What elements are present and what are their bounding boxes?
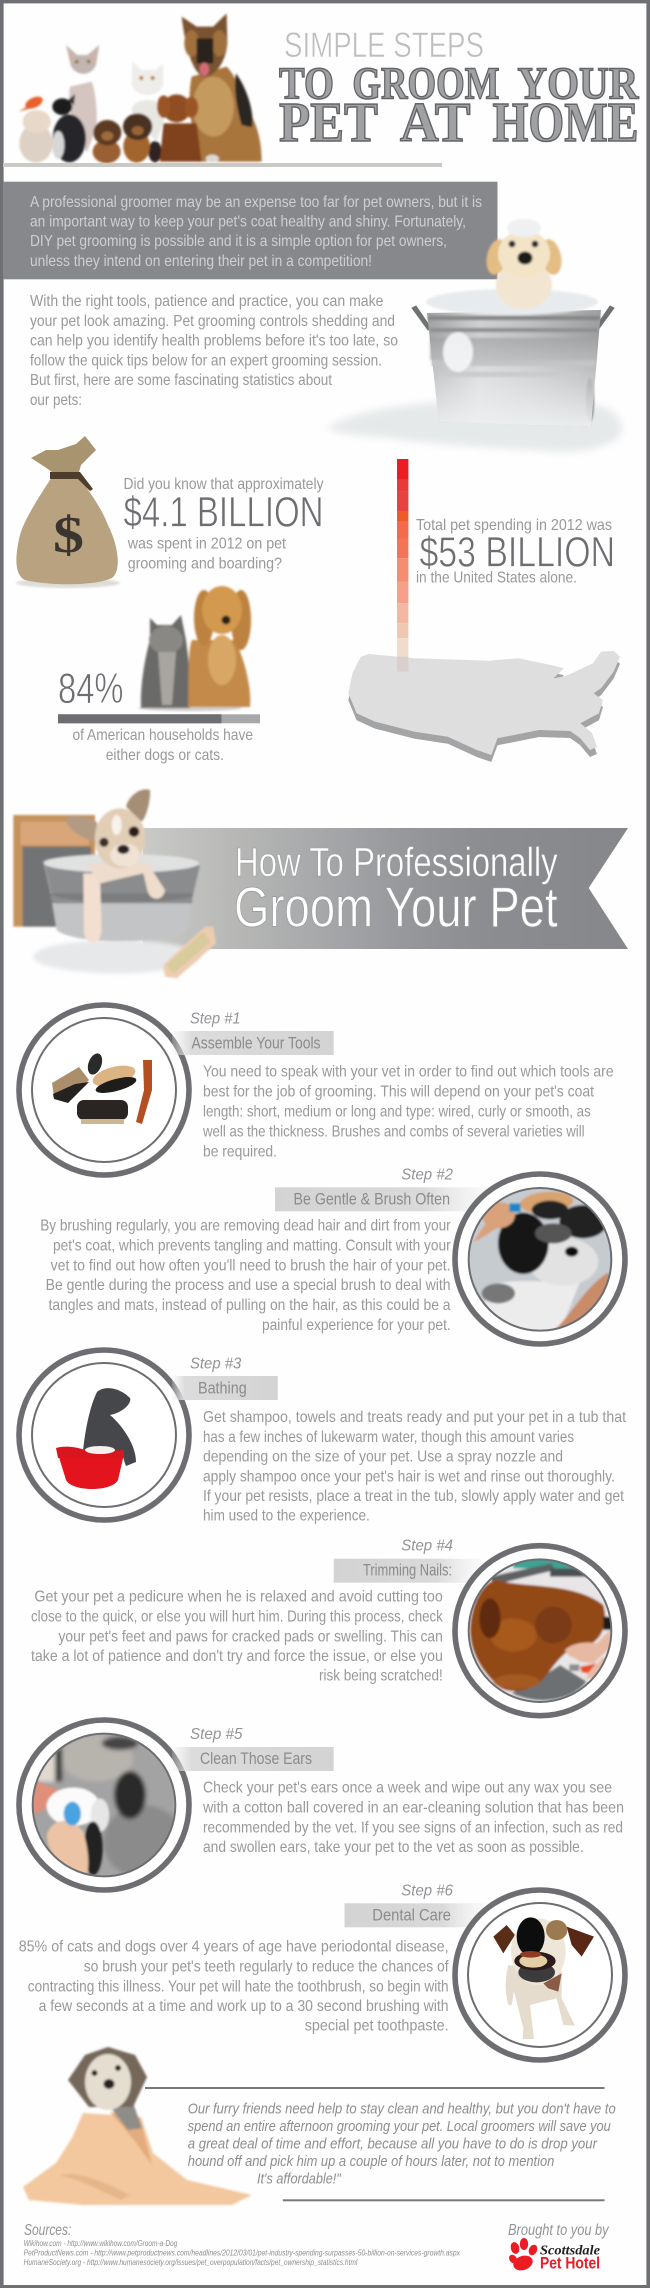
illustration: puppy in foamy tub	[327, 219, 622, 452]
panel: step 4: your pet's feet and paws for cracked pads or swelling. This can	[58, 1629, 443, 1646]
panel: step 2: By brushing regularly, you are removing dead hair and dirt from your	[40, 1218, 451, 1235]
stat: 4.1 billion: $4.1 BILLION	[124, 489, 324, 537]
stat: 53 billion: in the United States alone.	[416, 570, 577, 587]
text block: intro paragraph: our pets:	[30, 392, 82, 409]
logo: Scottsdale Pet Hotel: Brought to you by	[508, 2222, 609, 2239]
text block: intro paragraph: your pet look amazing. Pet grooming controls shedding and	[30, 313, 395, 330]
panel: step 4: close to the quick, or else you will hurt him. During this process, check	[31, 1609, 444, 1626]
panel: step 4: risk being scratched!	[319, 1668, 443, 1685]
panel: intro: unless they intend on entering their pet in a competition!	[30, 253, 372, 270]
illustration: french bulldog in tub	[13, 789, 216, 978]
illustration: wet dog in towel	[23, 2047, 252, 2205]
banner: section heading: How To Professionally	[235, 839, 558, 885]
panel: step 3: Step #3	[190, 1355, 241, 1372]
panel: step 4: Step #4	[401, 1538, 453, 1555]
step 2 circle with brushing photo	[455, 1174, 625, 1344]
panel: step 5	[19, 1720, 624, 1890]
illustration: cat and dog	[138, 586, 251, 711]
panel: step 2: Step #2	[401, 1166, 453, 1183]
panel: step 4	[31, 1538, 625, 1716]
panel: step 1: be required.	[203, 1143, 277, 1160]
stat: 4.1 billion: Did you know that approximately	[124, 476, 324, 493]
callout: closing quote: a great deal of time and effort, because all you have to do is drop your	[188, 2136, 598, 2153]
panel: step 5: Clean Those Ears	[200, 1750, 312, 1768]
panel: step 3: him used to the experience.	[203, 1508, 370, 1525]
text block: intro paragraph	[30, 293, 398, 409]
logo: Scottsdale Pet Hotel	[507, 2222, 609, 2273]
stat: 4.1 billion: was spent in 2012 on pet	[127, 535, 286, 552]
text block: sources: HumaneSociety.org - http://www.humanesociety.org/issues/pet_overpopulation/facts/pet_ownership_statistics.html	[24, 2257, 358, 2267]
logo: Scottsdale Pet Hotel: Scottsdale	[540, 2243, 600, 2258]
panel: step 6: so brush your pet's teeth regularly to reduce the chances of	[84, 1959, 449, 1976]
panel: step 4: Get your pet a pedicure when he is relaxed and avoid cutting too	[34, 1589, 443, 1606]
text block: sources: Sources:	[24, 2222, 71, 2239]
icon: money bag	[16, 436, 120, 588]
stat: 53 billion	[416, 517, 615, 587]
step 1 circle with grooming tools	[19, 1005, 189, 1175]
panel: step 4: Trimming Nails:	[363, 1561, 452, 1579]
callout: closing quote: hound off and pick him up a couple of hours later, not to mention	[188, 2153, 554, 2170]
panel: step 4: take a lot of patience and don't try and force the issue, or else you	[31, 1648, 443, 1665]
stat: 4.1 billion: grooming and boarding?	[128, 555, 282, 572]
text block: intro paragraph: follow the quick tips below for an expert grooming session.	[30, 353, 382, 370]
header shelf	[3, 163, 442, 167]
stat: 84 percent: of American households have	[72, 727, 253, 744]
panel: intro: A professional groomer may be an expense too far for pet owners, but it is	[30, 194, 482, 211]
panel: step 2: painful experience for your pet.	[262, 1317, 451, 1334]
panel: step 1	[19, 1005, 614, 1175]
icon: money bag: $	[53, 507, 84, 564]
panel: step 3: Bathing	[198, 1379, 247, 1397]
text block: intro paragraph: But first, here are some fascinating statistics about	[30, 372, 332, 389]
panel: step 2: vet to find out how often you'll need to brush the hair of your pet.	[51, 1258, 451, 1275]
title: PET	[279, 92, 378, 154]
panel: step 3: has a few inches of lukewarm water, though this amount varies	[203, 1429, 574, 1446]
banner: section heading	[143, 828, 628, 949]
stat: 84 percent: 84%	[58, 665, 124, 713]
panel: step 2: tangles and mats, instead of pulling on the hair, as this could be a	[48, 1297, 451, 1314]
step 6 circle with snarling dog	[455, 1890, 625, 2060]
title: YOUR	[517, 58, 639, 108]
panel: intro: DIY pet grooming is possible and it is a simple option for pet owners,	[30, 233, 447, 250]
title: GROOM	[352, 58, 499, 108]
panel: step 6: Dental Care	[372, 1907, 451, 1925]
panel: step 5: and swollen ears, take your pet to the vet as soon as possible.	[203, 1839, 584, 1856]
title	[279, 26, 639, 154]
stat: 4.1 billion	[124, 476, 324, 572]
illustration: group of pets	[18, 13, 262, 163]
text block: sources: Wikihow.com - http://www.wikihow.com/Groom-a-Dog	[24, 2238, 178, 2248]
panel: intro: an important way to keep your pet's coat healthy and shiny. Fortunately,	[30, 214, 466, 230]
panel: step 6: Step #6	[401, 1883, 453, 1900]
panel: step 6	[19, 1883, 625, 2060]
step 4 circle with nail trimming photo	[455, 1546, 625, 1716]
panel: step 5: Step #5	[190, 1726, 243, 1743]
panel: step 1: Assemble Your Tools	[192, 1034, 320, 1052]
panel: step 2: Be Gentle & Brush Often	[294, 1190, 450, 1208]
chart: US map with spending bar	[348, 459, 620, 762]
panel: step 3	[19, 1350, 626, 1525]
panel: step 2: pet's coat, which prevents tangling and matting. Consult with your	[53, 1238, 451, 1255]
text block: sources	[24, 2222, 461, 2267]
panel: step 3: depending on the size of your pet. Use a spray nozzle and	[203, 1449, 563, 1466]
callout: closing quote: It's affordable!"	[257, 2170, 341, 2187]
panel: intro	[3, 182, 498, 279]
title: SIMPLE STEPS	[284, 26, 484, 65]
title: AT	[400, 92, 470, 154]
step 5 circle with ear cleaning photo	[19, 1720, 189, 1890]
callout: closing quote	[145, 2087, 616, 2201]
panel: step 2	[40, 1166, 625, 1344]
stat: 84 percent: either dogs or cats.	[106, 747, 224, 764]
banner: section heading: Groom Your Pet	[234, 876, 558, 940]
logo: Scottsdale Pet Hotel: Pet Hotel	[540, 2253, 600, 2272]
panel: step 6: 85% of cats and dogs over 4 years of age have periodontal disease,	[19, 1939, 449, 1956]
panel: step 6: special pet toothpaste.	[305, 2018, 449, 2035]
panel: step 1: best for the job of grooming. This will depend on your pet's coat	[203, 1084, 594, 1100]
panel: step 6: a few seconds at a time and work up to a 30 second brushing with	[39, 1998, 449, 2015]
stat: 53 billion: Total pet spending in 2012 was	[416, 517, 612, 534]
text block: intro paragraph: can help you identify health problems before it's too late, so	[30, 333, 398, 350]
stat: 84 percent	[58, 665, 260, 764]
title: TO	[279, 58, 334, 108]
panel: step 6: contracting this illness. Your pet will hate the toothbrush, so begin with	[28, 1978, 449, 1995]
panel: step 2: Be gentle during the process and use a special brush to deal with	[46, 1277, 451, 1294]
step 3 circle with bathing dog	[19, 1350, 189, 1520]
text block: intro paragraph: With the right tools, patience and practice, you can make	[30, 293, 384, 310]
panel: step 1: Step #1	[190, 1010, 240, 1027]
text block: sources: PetProductNews.com - http://www.petproductnews.com/headlines/2012/03/01/pet-industry-spending-surpasses-50-billion-on-services-growth.aspx	[24, 2247, 461, 2257]
